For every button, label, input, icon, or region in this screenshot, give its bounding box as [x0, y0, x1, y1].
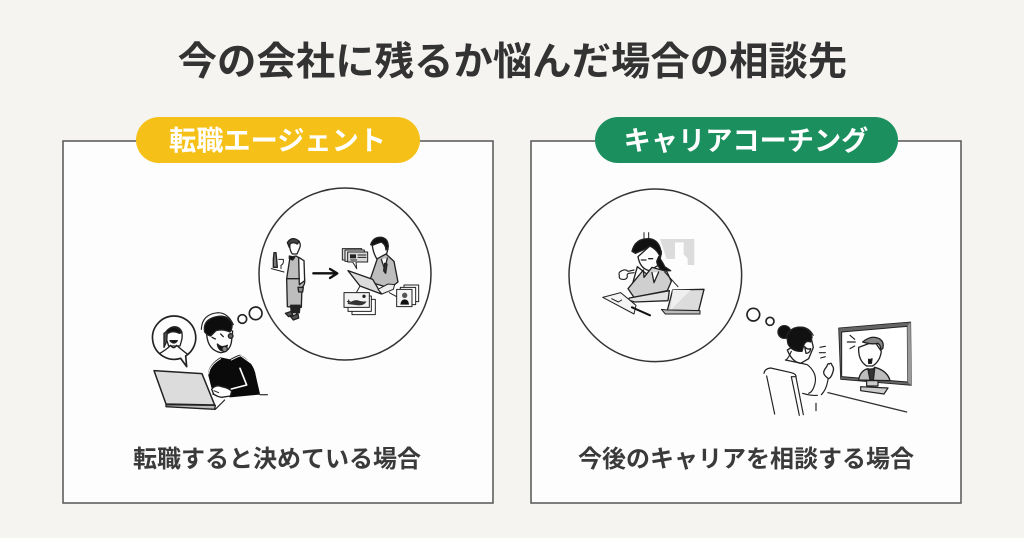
- icon: papers and pen: [603, 293, 650, 315]
- icon: man body: [209, 355, 259, 397]
- illustration: woman consulting a coach online: [569, 189, 911, 415]
- icon: advisor speech bubble: [152, 316, 196, 367]
- icon: worried woman: [628, 233, 678, 302]
- icon: consultant laptop: [348, 271, 381, 294]
- icon: job listing cards: [342, 249, 368, 269]
- thought circle: [259, 188, 431, 360]
- icon: laptop on desk: [661, 289, 704, 314]
- badge: 転職エージェント: 転職エージェント: [169, 125, 386, 156]
- icon: man head: [201, 313, 233, 353]
- icon: building background: [660, 239, 694, 265]
- icon: consultant: [369, 237, 398, 288]
- icon: monitor stand: [861, 381, 888, 394]
- panel frame right: [531, 141, 961, 503]
- panel frame left: [63, 141, 493, 503]
- arrow: [313, 269, 337, 278]
- badge: 転職エージェント: [136, 117, 420, 163]
- thought bubbles: [238, 307, 262, 323]
- title: 今の会社に残るか悩んだ場合の相談先: [178, 40, 847, 84]
- panel: 転職エージェント: [63, 117, 493, 503]
- panel: キャリアコーチング: [531, 117, 961, 503]
- icon: laptop: [154, 371, 215, 405]
- badge: キャリアコーチング: [595, 117, 898, 163]
- icon: monitor with coach: [839, 322, 911, 385]
- thought bubbles: [747, 308, 774, 325]
- caption right: 今後のキャリアを相談する場合: [578, 446, 914, 473]
- illustration: person at laptop imagining a career change: [152, 188, 431, 409]
- thought circle: [569, 189, 742, 362]
- icon: portrait photo cards: [397, 285, 419, 307]
- icon: landscape photo cards: [344, 293, 375, 315]
- icon: chair: [764, 368, 803, 415]
- icon: sigh puff: [619, 270, 634, 279]
- caption left: 転職すると決めている場合: [133, 446, 421, 473]
- icon: hand: [212, 386, 232, 397]
- desk edge: [828, 393, 907, 412]
- badge: キャリアコーチング: キャリアコーチング: [624, 125, 868, 156]
- icon: woman with bun: [778, 326, 834, 411]
- icon: waiter: [271, 239, 305, 320]
